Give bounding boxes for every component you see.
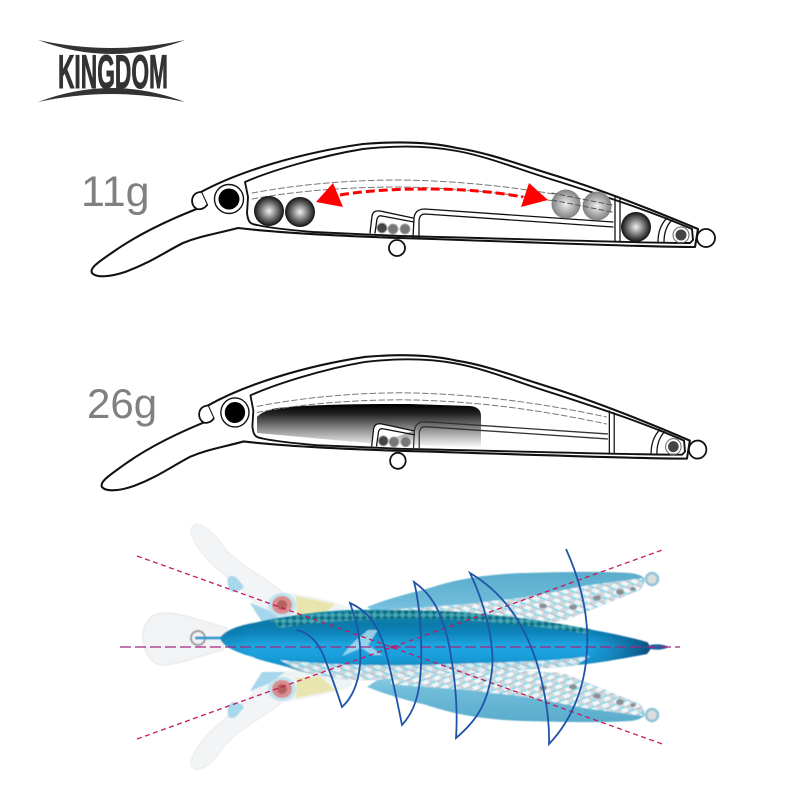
- internal frame: [370, 209, 613, 237]
- body reflection: [342, 630, 382, 656]
- lower tail ring: [646, 709, 658, 721]
- center body end shading: [220, 610, 650, 680]
- belly scales: [280, 656, 590, 680]
- lure outline: [102, 354, 690, 490]
- upper scale band: [390, 578, 643, 630]
- upper hook eye: [228, 576, 244, 592]
- belly hook loop: [389, 240, 405, 256]
- lower hook eye: [228, 702, 244, 718]
- lure photo: swimming action: [120, 524, 680, 770]
- steel balls faded rear: [552, 190, 612, 220]
- tail eye: [673, 227, 689, 243]
- head eye: [214, 184, 244, 214]
- lower swing lure: [191, 664, 658, 770]
- rear bulkhead: [615, 197, 672, 242]
- swing axis dashed lines: [120, 549, 680, 745]
- dashed weight channel: [252, 180, 612, 212]
- lure inner wall: [245, 147, 693, 243]
- steel balls front: [254, 196, 315, 227]
- upper body: [367, 572, 644, 630]
- upper head: [250, 592, 352, 625]
- steel ball rear fixed: [621, 212, 651, 242]
- lower lip: [191, 684, 283, 770]
- rear bulkhead: [609, 411, 665, 454]
- upper lip: [191, 524, 283, 610]
- lure inner wall: [250, 358, 685, 456]
- dashed channel over faded balls: [552, 193, 612, 212]
- tow eye nub: [192, 192, 207, 209]
- upper head eye: [268, 593, 296, 617]
- small weights: [378, 436, 410, 447]
- logo: Kingdom: [38, 40, 185, 102]
- nose ring: [689, 441, 706, 459]
- tail tip: [650, 644, 668, 650]
- tow eye nub: [199, 406, 214, 423]
- upper swing lure: [191, 524, 658, 630]
- internal frame: [372, 421, 607, 450]
- lower belly spots: [539, 684, 636, 707]
- tail eye: [666, 439, 681, 455]
- lure diagram: 11g moving weights: [92, 142, 715, 276]
- lure diagram: 26g fixed weight: [102, 354, 706, 490]
- red double arrow: [316, 183, 548, 207]
- label: 11g: 11g: [81, 168, 150, 216]
- back scales: [270, 610, 590, 634]
- upper tail ring: [646, 573, 658, 585]
- center body: [220, 610, 650, 680]
- gradient fixed weight: [257, 404, 481, 448]
- label: 26g: 26g: [87, 380, 157, 427]
- small weights: [377, 223, 410, 234]
- logo: Kingdom: KINGDOM: [58, 45, 168, 98]
- dashed weight channel: [257, 392, 606, 425]
- lower head eye: [268, 677, 296, 701]
- lower body: [367, 664, 644, 722]
- belly hook loop: [390, 453, 406, 469]
- split ring and wire: [191, 631, 222, 645]
- head eye: [221, 398, 249, 427]
- center lure: [143, 610, 668, 680]
- upper belly spots: [539, 587, 636, 610]
- lower head: [250, 669, 352, 702]
- lower scale band: [390, 664, 643, 716]
- lure outline: [92, 142, 698, 276]
- blue spiral action curve: [297, 549, 587, 744]
- center lip: [143, 613, 227, 665]
- nose ring: [697, 229, 715, 247]
